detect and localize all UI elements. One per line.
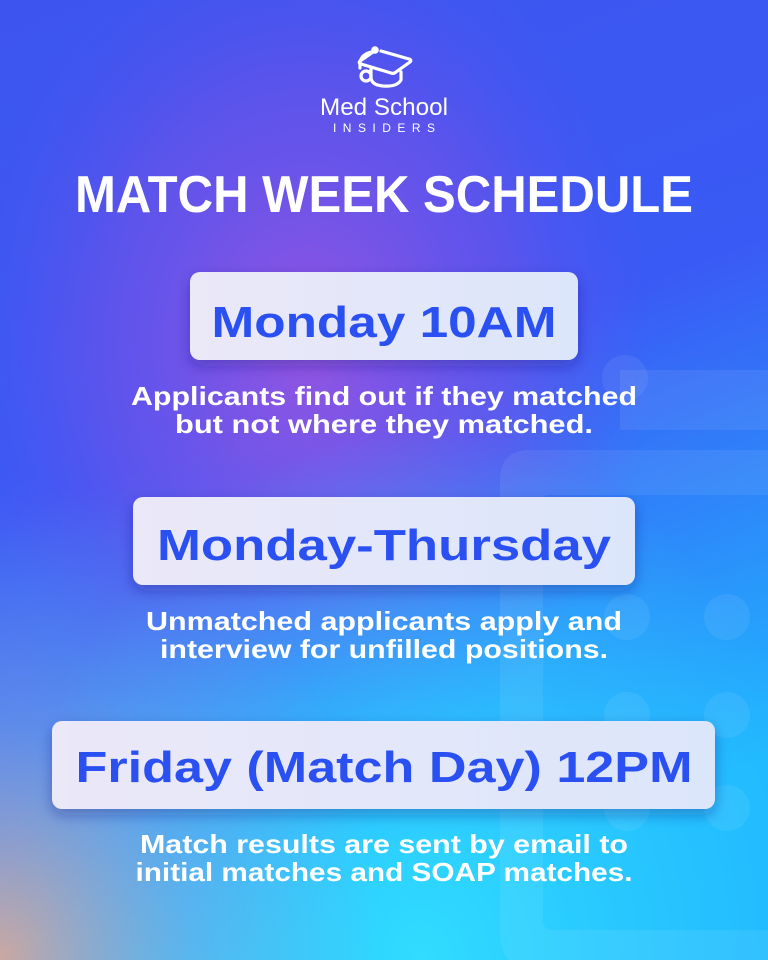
text block: monday: Applicants find out if they matched <box>131 381 637 411</box>
text block: monday-thursday: Unmatched applicants apply and <box>146 606 622 636</box>
panel: Monday-Thursday: Monday-Thursday <box>157 521 612 570</box>
panel: Friday <box>52 721 715 809</box>
panel: Monday 10AM <box>190 272 578 360</box>
text block: monday-thursday: interview for unfilled positions. <box>160 634 608 664</box>
title: MATCH WEEK SCHEDULE <box>75 166 693 224</box>
text block: monday: but not where they matched. <box>175 409 593 439</box>
logo <box>320 48 448 135</box>
panel: Monday-Thursday <box>133 497 635 585</box>
panel: Friday: Friday (Match Day) 12PM <box>76 743 692 792</box>
text block: monday-thursday <box>146 606 622 664</box>
logo text: Med School <box>320 94 448 121</box>
text block: friday <box>136 829 632 887</box>
text block: friday: initial matches and SOAP matches. <box>136 857 632 887</box>
logo: INSIDERS <box>333 121 435 135</box>
text block: monday <box>131 381 637 439</box>
panel: Monday 10AM: Monday 10AM <box>212 298 556 347</box>
text block: friday: Match results are sent by email to <box>140 829 628 859</box>
decorative logo shape <box>500 355 768 960</box>
icon: graduation cap stethoscope <box>359 48 411 86</box>
